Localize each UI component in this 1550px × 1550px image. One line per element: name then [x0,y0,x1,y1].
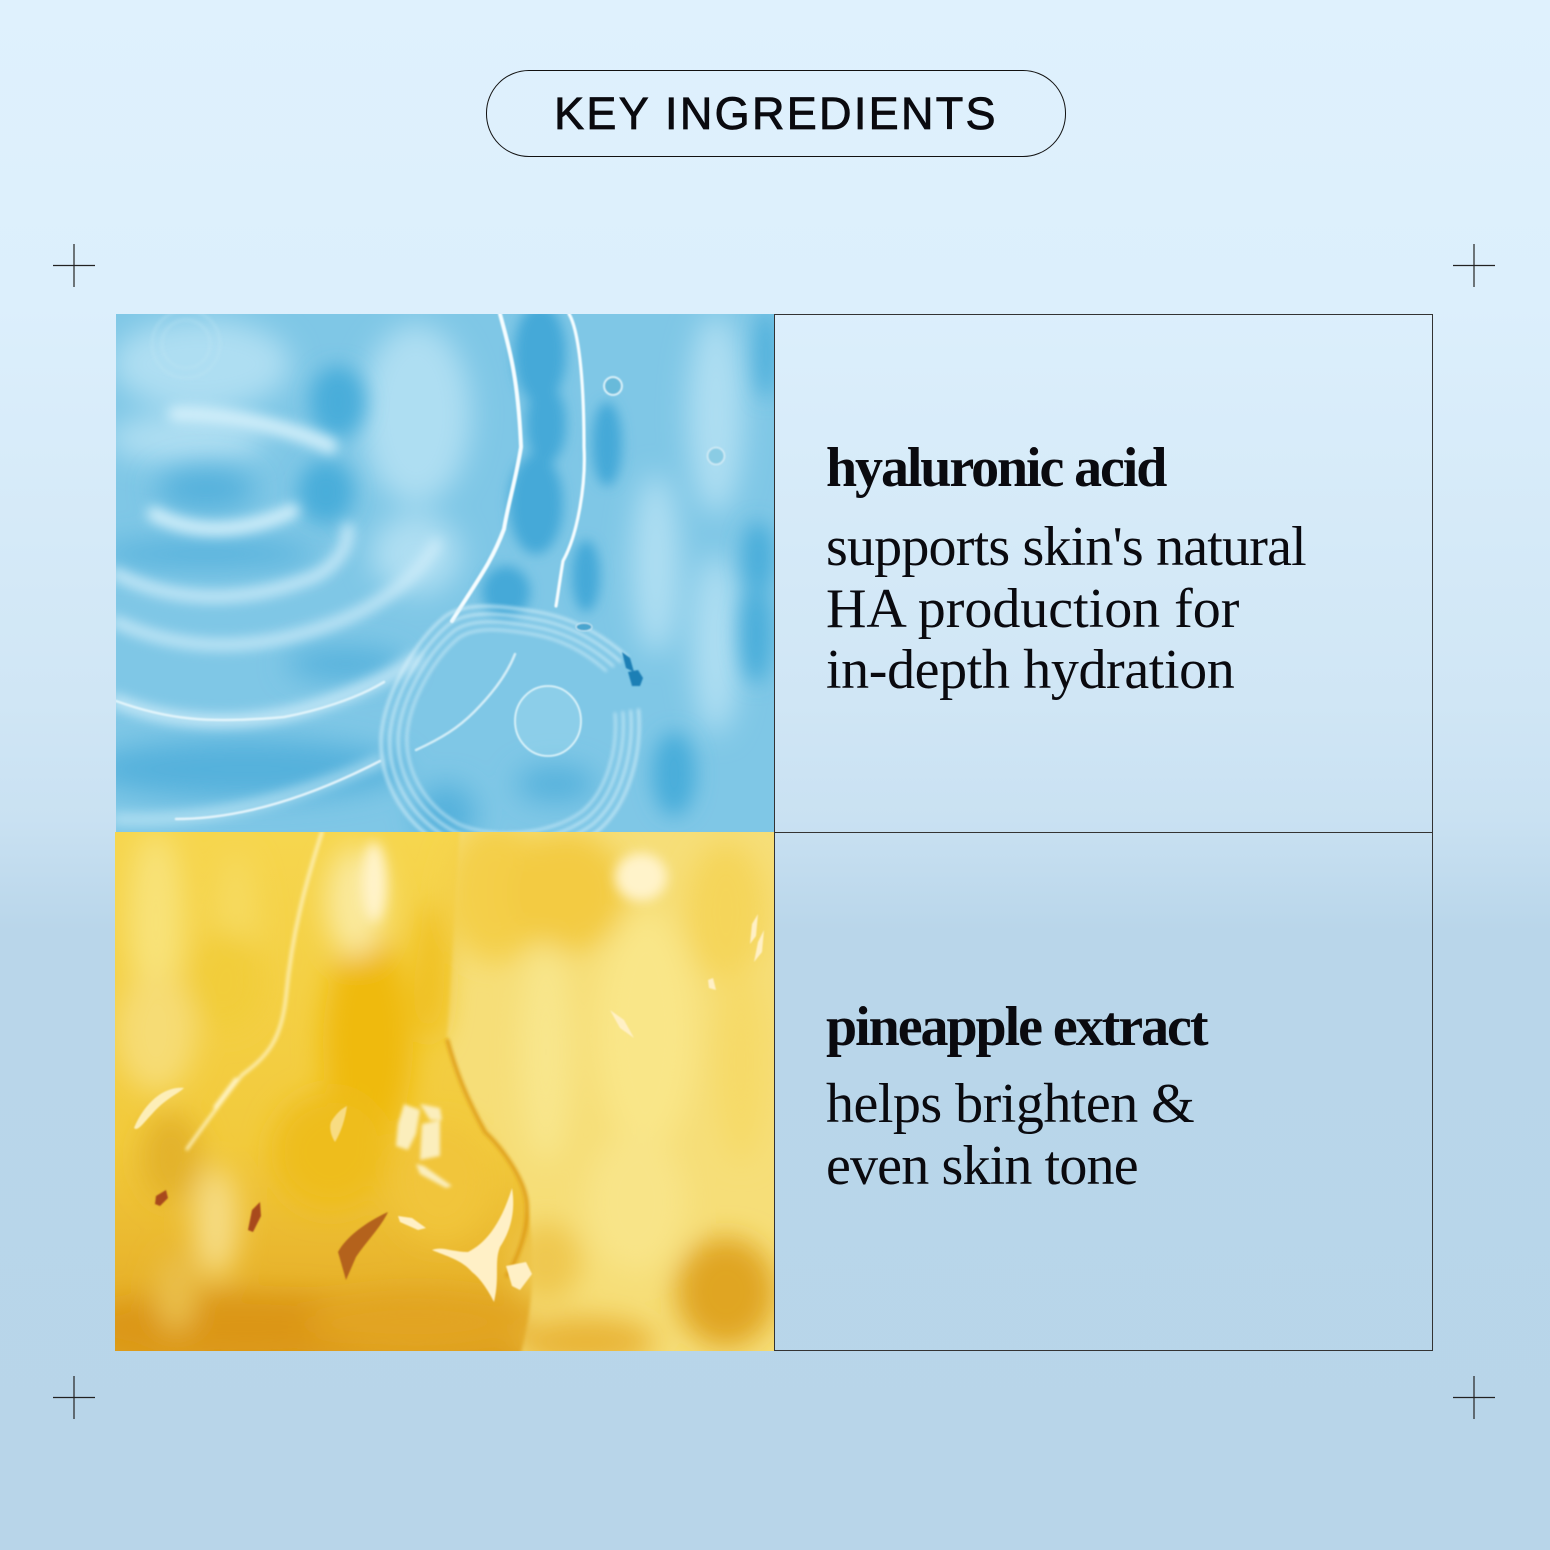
dark shadow pools [482,304,622,618]
panel: hyaluronic acid [774,314,1433,833]
image panel: pineapple flesh [115,832,774,1351]
description: pineapple extract: helps brighten & [826,1073,1194,1135]
description: pineapple extract: even skin tone [826,1134,1138,1196]
panel: pineapple extract [774,832,1433,1351]
title pill: key ingredients: KEY INGREDIENTS [554,88,998,139]
faint small ring top-left [158,314,210,324]
broad soft ripple highlights [116,414,436,820]
pineapple ridges [396,1104,452,1188]
title pill: key ingredients [486,70,1066,157]
description: pineapple extract [826,1073,1194,1196]
brown marks [155,1190,388,1280]
white splash [330,914,764,1302]
main bubble [515,686,581,756]
tear edge shadow [447,1039,527,1277]
small droplets [576,377,724,686]
left flap highlight [134,1088,184,1129]
sharp caustic lines [116,314,584,819]
soft pale bands [106,314,744,734]
colour pools [115,832,774,1351]
heading: pineapple extract: pineapple extract [826,996,1206,1058]
description: hyaluronic acid: supports skin's natural [826,516,1306,578]
white glare top right [362,842,667,922]
heading: hyaluronic acid: hyaluronic acid [826,437,1165,499]
description: hyaluronic acid: HA production for [826,578,1239,640]
description: hyaluronic acid: in-depth hydration [826,639,1234,701]
pale right flesh with soft upper edge [446,832,774,1351]
image panel: water ripples [116,314,774,832]
description: hyaluronic acid [826,516,1306,701]
concentric ripple rings around bubble [381,606,639,858]
membrane streak [187,832,322,1149]
